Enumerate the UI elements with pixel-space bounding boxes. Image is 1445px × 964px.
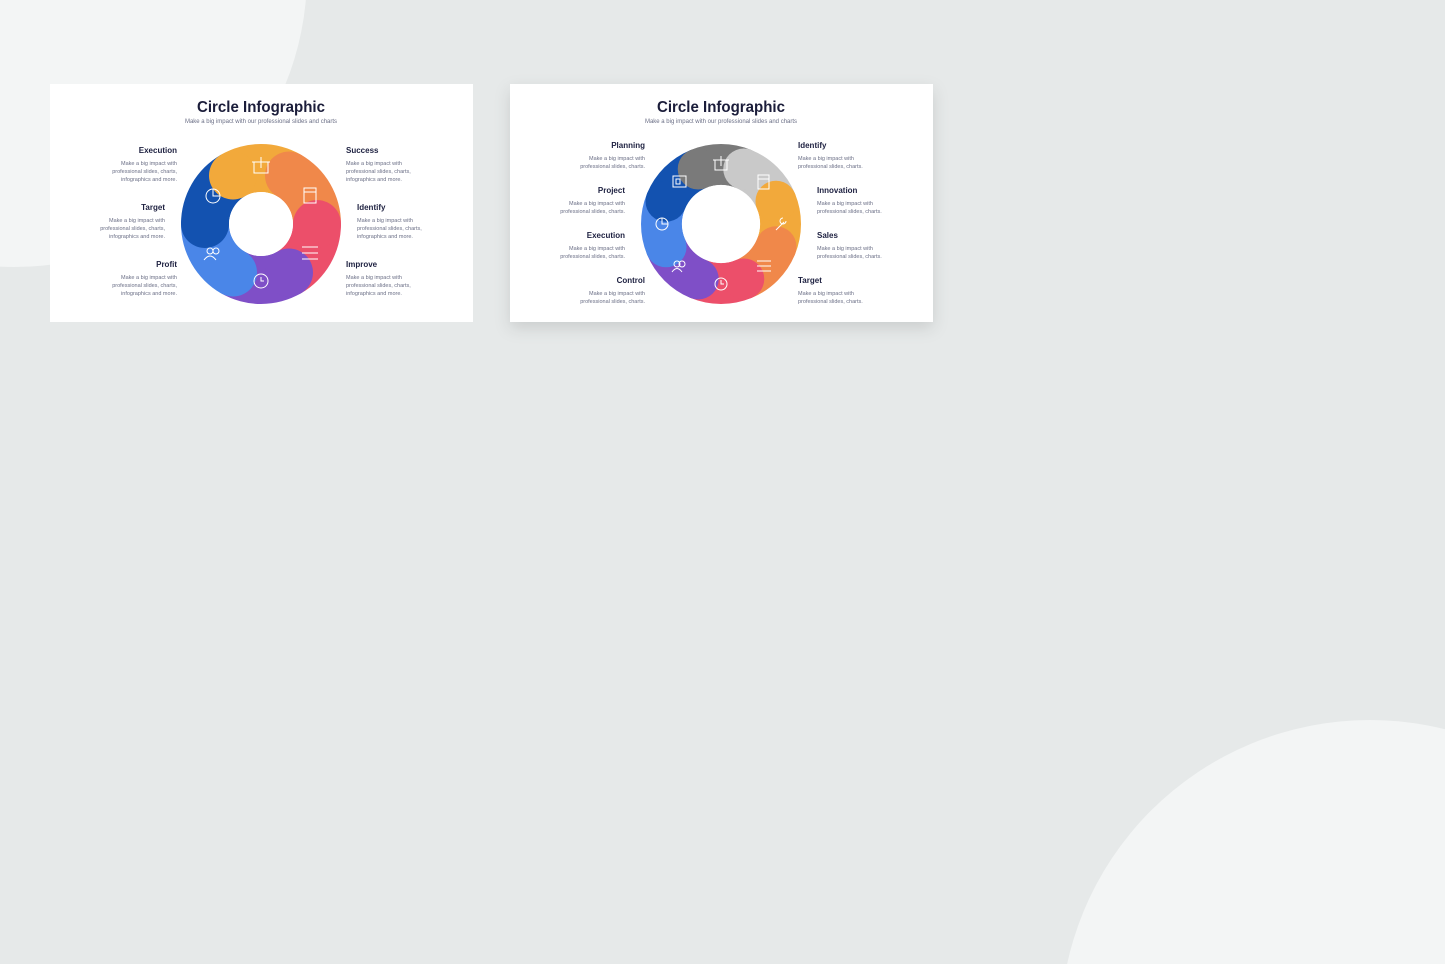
labels 2: Sales xyxy=(817,231,838,240)
panel: card 2: professional slides, charts. xyxy=(560,254,625,260)
panel: card 1: professional slides, charts, xyxy=(100,226,165,232)
panel: card 2: Make a big impact with xyxy=(817,201,873,207)
labels 2: Innovation xyxy=(817,186,858,195)
labels 1: Identify xyxy=(357,203,386,212)
panel: card 1: professional slides, charts, xyxy=(112,169,177,175)
panel: card 1: Make a big impact with xyxy=(346,161,402,167)
panel: card 2: professional slides, charts. xyxy=(580,164,645,170)
labels 2: Identify xyxy=(798,141,827,150)
title 1: Circle Infographic xyxy=(197,99,325,116)
panel: card 1: infographics and more. xyxy=(121,291,177,297)
panel: card 2: professional slides, charts. xyxy=(817,254,882,260)
donut chart 2 xyxy=(637,137,808,311)
panel: card 1: professional slides, charts, xyxy=(346,283,411,289)
panel: card 1: professional slides, charts, xyxy=(357,226,422,232)
labels 2: Project xyxy=(598,186,625,195)
labels 1: Improve xyxy=(346,260,378,269)
labels 2: Control xyxy=(617,276,645,285)
panel: card 1: infographics and more. xyxy=(109,234,165,240)
panel: card 2: Make a big impact with xyxy=(798,291,854,297)
labels 1: Execution xyxy=(139,146,177,155)
panel: card 1: professional slides, charts, xyxy=(346,169,411,175)
panel: card 1: professional slides, charts, xyxy=(112,283,177,289)
labels 1: Success xyxy=(346,146,379,155)
subtitle 1: Make a big impact with our professional slides and charts xyxy=(185,119,337,125)
icons 2 xyxy=(656,156,786,290)
panel: card 1: Make a big impact with xyxy=(346,275,402,281)
panel: card 1: Make a big impact with xyxy=(121,161,177,167)
panel: card 1: infographics and more. xyxy=(121,177,177,183)
labels 1: Profit xyxy=(156,260,177,269)
labels 2: Target xyxy=(798,276,822,285)
panel: card 2: Make a big impact with xyxy=(569,246,625,252)
panel: card 1: infographics and more. xyxy=(357,234,413,240)
panel: card 2: professional slides, charts. xyxy=(580,299,645,305)
labels 1 xyxy=(139,146,386,269)
labels 1: Target xyxy=(141,203,165,212)
panel: card 1: infographics and more. xyxy=(346,177,402,183)
labels 2: Planning xyxy=(611,141,645,150)
donut chart 1 xyxy=(172,139,356,309)
labels 2 xyxy=(587,141,858,285)
icons 1 xyxy=(204,157,318,288)
panel: card 1: Make a big impact with xyxy=(357,218,413,224)
panel: card 2: professional slides, charts. xyxy=(817,209,882,215)
panel: card 1: Make a big impact with xyxy=(109,218,165,224)
panel: card 2: professional slides, charts. xyxy=(798,299,863,305)
subtitle 2: Make a big impact with our professional slides and charts xyxy=(645,119,797,125)
panel: card 2: professional slides, charts. xyxy=(560,209,625,215)
panel: card 1: Make a big impact with xyxy=(121,275,177,281)
labels 2: Execution xyxy=(587,231,625,240)
panel: card 2: Make a big impact with xyxy=(798,156,854,162)
panel: card 1: infographics and more. xyxy=(346,291,402,297)
panel: card 2: Make a big impact with xyxy=(569,201,625,207)
panel: card 2 xyxy=(510,84,933,322)
panel: card 2: Make a big impact with xyxy=(589,156,645,162)
panel: card 2: Make a big impact with xyxy=(817,246,873,252)
panel: card 2: Make a big impact with xyxy=(589,291,645,297)
panel: card 2: professional slides, charts. xyxy=(798,164,863,170)
panel: card 1 xyxy=(50,84,473,322)
title 2: Circle Infographic xyxy=(657,99,785,116)
